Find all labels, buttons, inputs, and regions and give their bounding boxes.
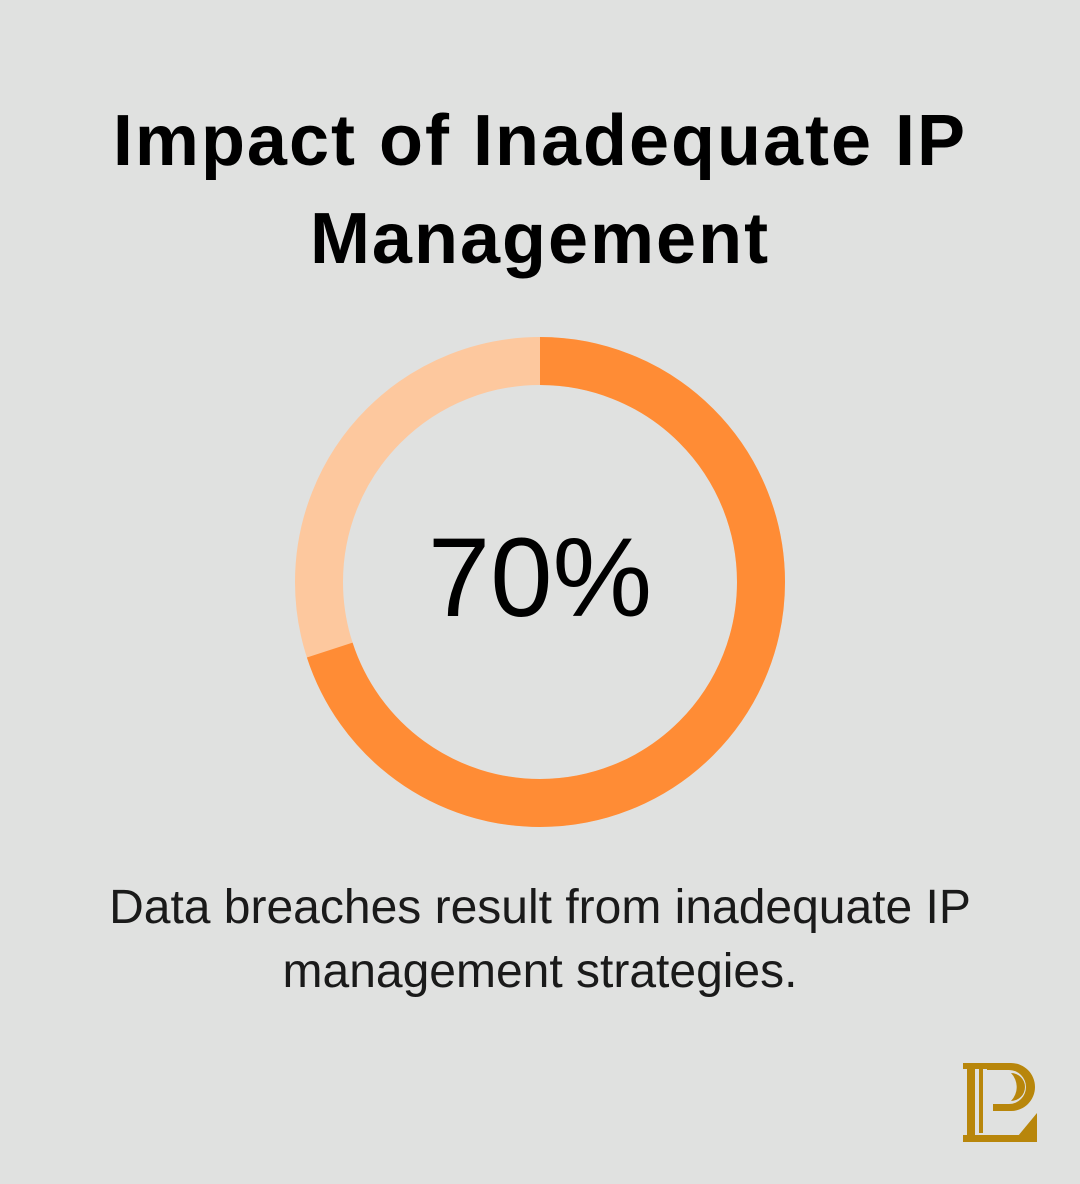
title: Management [310, 199, 770, 279]
ring value 70% [319, 361, 761, 803]
caption [109, 881, 971, 998]
ring background [319, 361, 761, 803]
caption: management strategies. [283, 945, 797, 998]
center value: 70% [428, 515, 652, 640]
caption: Data breaches result from inadequate IP [109, 881, 971, 934]
logo [963, 1063, 1037, 1142]
title: Impact of Inadequate IP [113, 101, 967, 181]
title [113, 101, 967, 279]
